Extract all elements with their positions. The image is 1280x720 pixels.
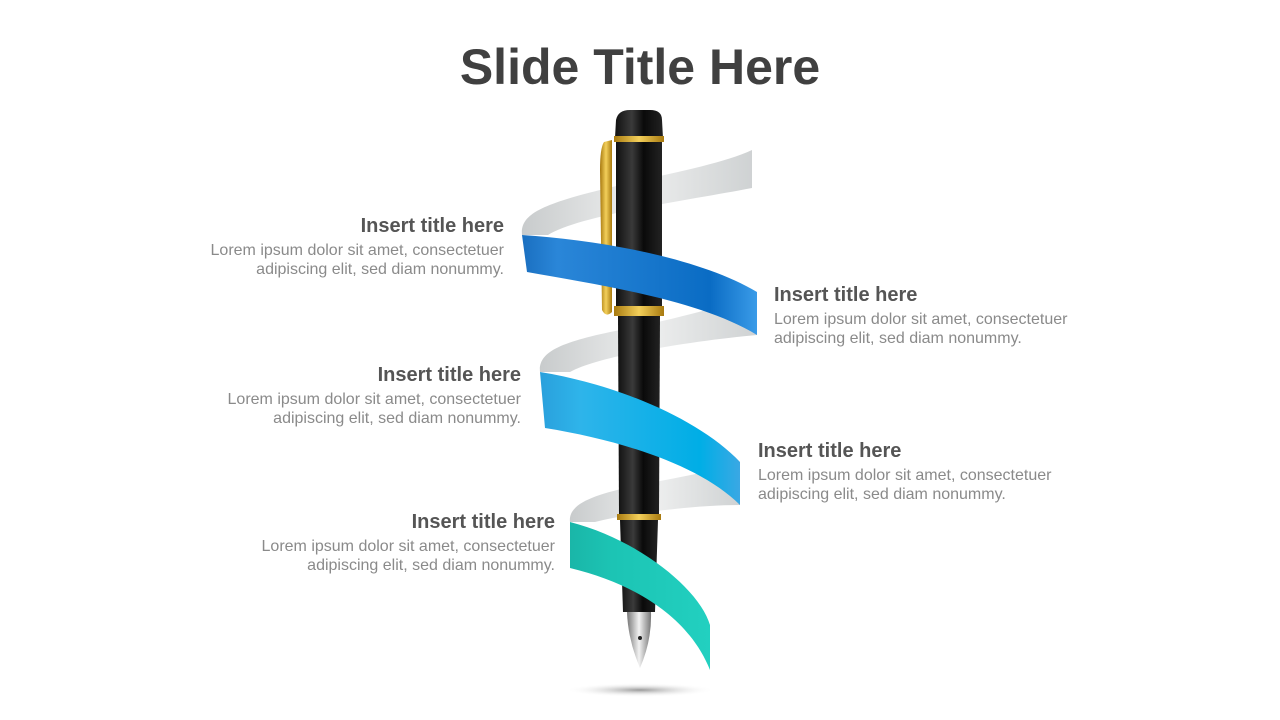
text block 4: Insert title here xyxy=(758,440,901,462)
shadow xyxy=(565,683,715,697)
text block 4: Lorem ipsum dolor sit amet, consectetuer xyxy=(758,467,1051,484)
text block 5: adipiscing elit, sed diam nonummy. xyxy=(307,557,555,574)
pen xyxy=(600,110,664,668)
text block 3: adipiscing elit, sed diam nonummy. xyxy=(273,410,521,427)
gray back ribbons xyxy=(522,150,757,522)
text block 1: Insert title here xyxy=(361,215,504,237)
front ribbons xyxy=(522,235,757,335)
text block 5 xyxy=(262,511,555,574)
text block 1 xyxy=(211,215,504,278)
title: Slide Title Here xyxy=(460,39,820,95)
text block 1: Lorem ipsum dolor sit amet, consectetuer xyxy=(211,242,504,259)
text block 2: Insert title here xyxy=(774,284,917,306)
pen clip xyxy=(600,140,612,315)
text block 3: Insert title here xyxy=(378,364,521,386)
text block 2: adipiscing elit, sed diam nonummy. xyxy=(774,330,1022,347)
text block 3 xyxy=(228,364,521,427)
text block 2: Lorem ipsum dolor sit amet, consectetuer xyxy=(774,311,1067,328)
text block 5: Insert title here xyxy=(412,511,555,533)
text block 2 xyxy=(774,284,1068,347)
text block 1: adipiscing elit, sed diam nonummy. xyxy=(256,261,504,278)
text block 4 xyxy=(758,440,1052,503)
text block 5: Lorem ipsum dolor sit amet, consectetuer xyxy=(262,538,555,555)
text block 4: adipiscing elit, sed diam nonummy. xyxy=(758,486,1006,503)
text block 3: Lorem ipsum dolor sit amet, consectetuer xyxy=(228,391,521,408)
